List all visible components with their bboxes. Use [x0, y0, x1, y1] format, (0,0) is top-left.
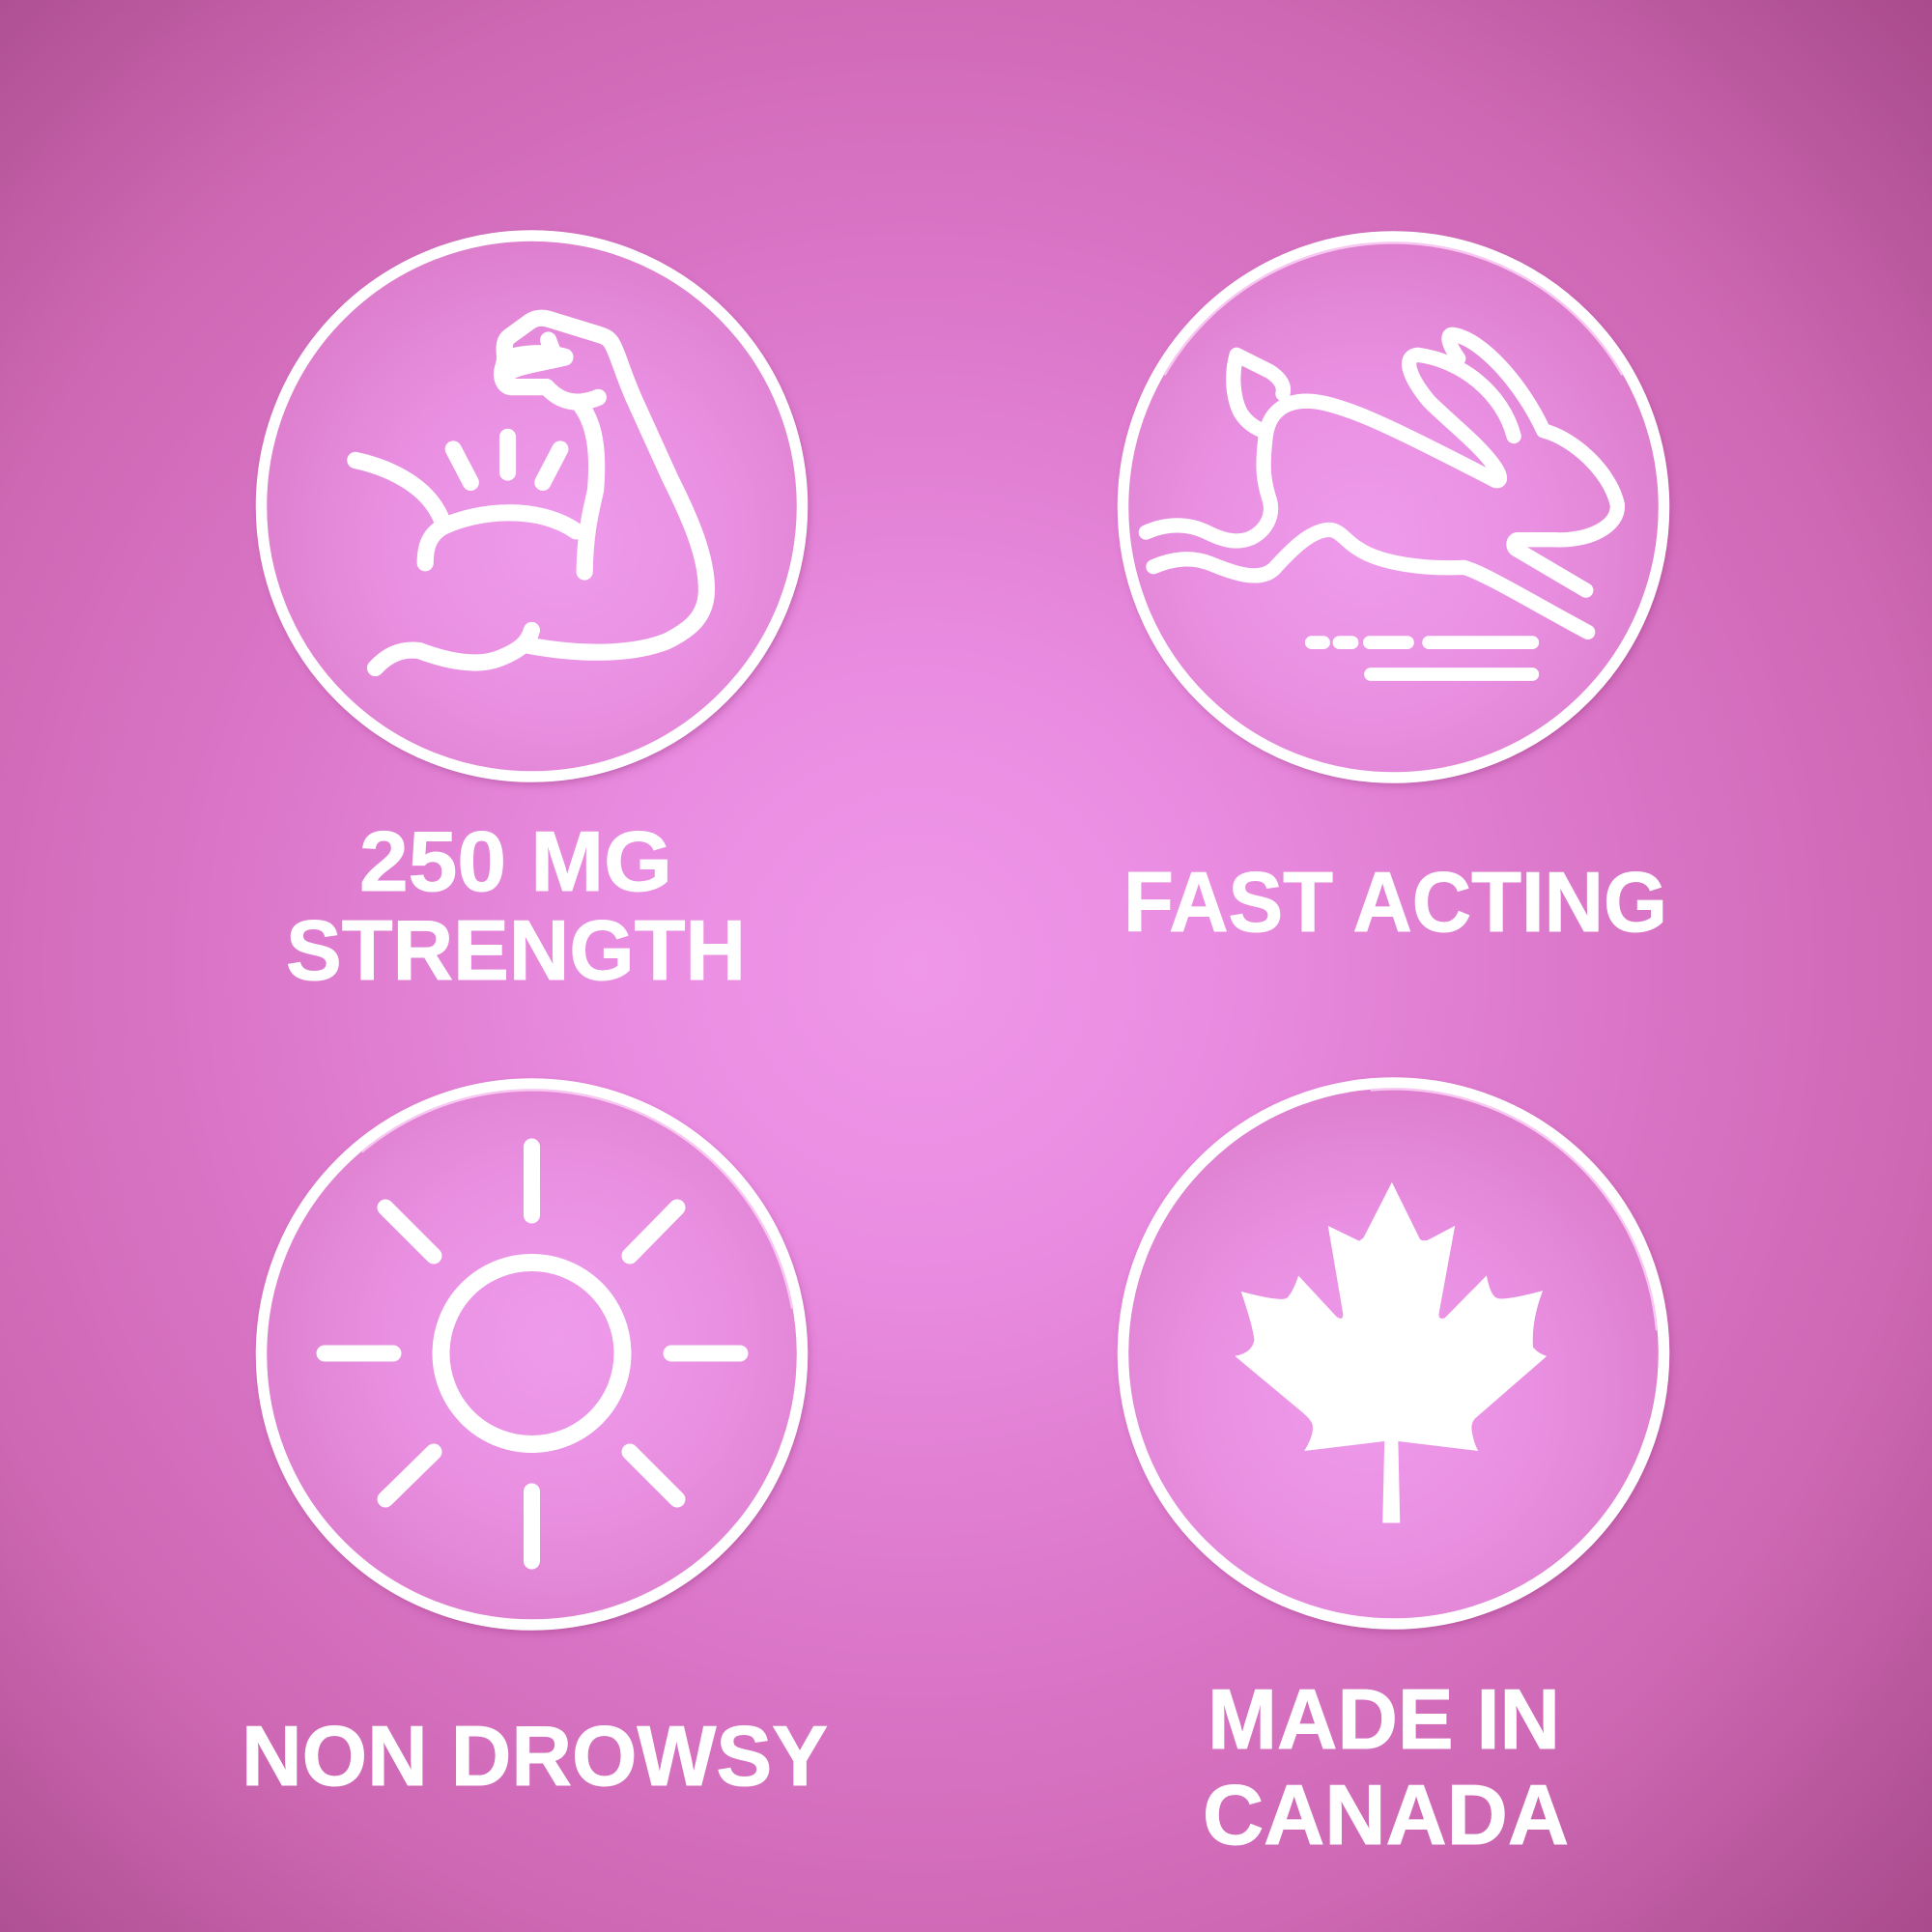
icon: flexed arm [355, 318, 706, 668]
label: 250 mg strength: STRENGTH [286, 902, 746, 998]
icon: running rabbit [1146, 334, 1617, 674]
label: made in canada: CANADA [1203, 1767, 1569, 1862]
icon: maple leaf [1236, 1184, 1546, 1522]
label: made in canada: MADE IN [1208, 1671, 1560, 1767]
panel: fast acting [1122, 237, 1669, 950]
badge circle: non drowsy [261, 1084, 808, 1632]
label: 250 mg strength [286, 813, 746, 998]
badge circle: strength [261, 236, 808, 783]
label: fast acting: FAST ACTING [1123, 854, 1667, 950]
panel: made in canada [1122, 1083, 1669, 1862]
badge circle: made in canada [1122, 1083, 1669, 1631]
panel: non drowsy [242, 1084, 828, 1804]
panel: 250 mg strength [261, 236, 808, 998]
label: made in canada [1203, 1671, 1569, 1862]
badge circle: fast acting [1122, 237, 1669, 784]
label: non drowsy: NON DROWSY [242, 1708, 828, 1804]
icon: sun [325, 1147, 740, 1561]
label: 250 mg strength: 250 MG [359, 813, 672, 909]
